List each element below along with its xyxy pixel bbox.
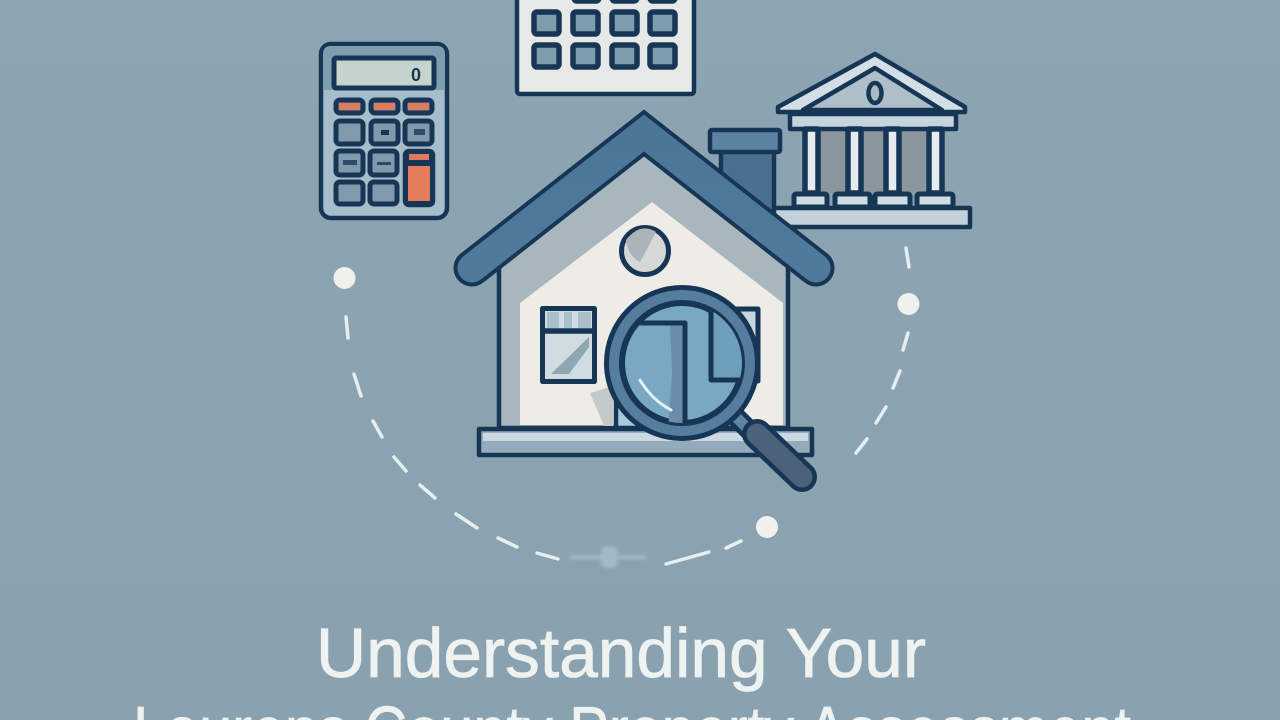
lens highlight (640, 380, 671, 410)
icon: calendar (517, 0, 694, 94)
magnified door and window (639, 310, 742, 423)
faded orbit marker (570, 546, 646, 568)
right window (700, 309, 758, 381)
courthouse platform (770, 208, 970, 227)
calculator number keys (336, 121, 432, 204)
calculator display (334, 58, 434, 88)
orbit dots (334, 267, 920, 538)
foundation (479, 429, 812, 455)
courthouse entablature (790, 114, 956, 129)
calculator display digit: 0 (411, 65, 421, 85)
door (616, 340, 686, 428)
round attic window (622, 228, 668, 274)
chimney (710, 130, 780, 225)
magnifier lens (622, 303, 742, 423)
infographic illustration (138, 0, 1130, 720)
title (133, 614, 1131, 720)
courthouse column bases (794, 194, 953, 207)
icon: calculator (321, 44, 447, 218)
left window (542, 308, 595, 382)
icon: courthouse (770, 54, 970, 227)
magnifier ring (606, 288, 758, 438)
roof (472, 133, 816, 268)
magnifier handle (735, 416, 802, 477)
dashed orbit (346, 248, 909, 564)
house cream front (520, 202, 783, 425)
calculator orange keys (336, 100, 432, 113)
calculator equals key (405, 151, 433, 205)
courthouse gray interior (820, 129, 927, 193)
calendar day cells (534, 0, 675, 67)
wall shadow (590, 386, 613, 426)
icon: house (472, 130, 816, 455)
courthouse pediment (778, 54, 965, 112)
icon: magnifying glass (606, 288, 802, 477)
house walls (499, 150, 788, 428)
courthouse columns (805, 129, 942, 193)
title: Understanding Your (316, 614, 926, 692)
